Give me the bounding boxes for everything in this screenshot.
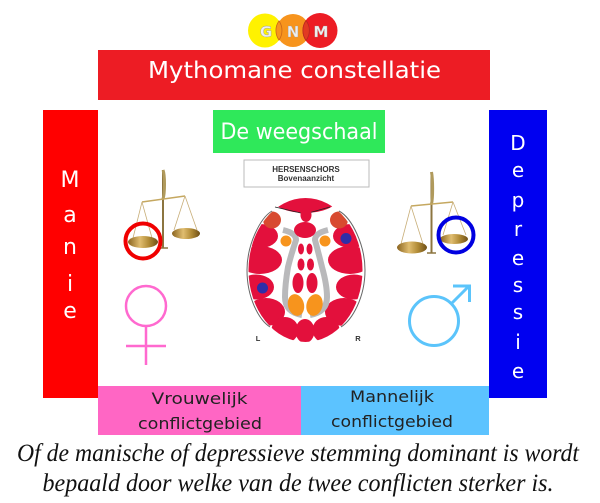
panel: Manie: n	[63, 235, 77, 260]
icon: male symbol	[410, 286, 470, 346]
panel: Mannelijk conflictgebied: Mannelijk	[350, 387, 435, 406]
title banner	[98, 50, 490, 100]
title banner: Mythomane constellatie	[148, 58, 441, 84]
logo: GNM: G	[260, 23, 272, 41]
central red regions	[292, 208, 318, 293]
icon: scales left	[126, 170, 200, 258]
panel: Vrouwelijk conflictgebied: conflictgebied	[138, 414, 262, 433]
panel: Depressie: s	[513, 273, 523, 297]
panel: Manie: i	[67, 272, 73, 297]
panel: Depressie: e	[512, 246, 524, 270]
panel: Depressie: r	[514, 217, 523, 241]
grey ventricles	[283, 230, 302, 315]
panel: Manie: a	[63, 203, 77, 228]
panel: Depressie	[489, 110, 547, 398]
heading: De weegschaal	[213, 110, 385, 153]
logo: GNM: M	[314, 23, 328, 41]
panel: Depressie: e	[512, 158, 524, 182]
outer arcs	[247, 211, 272, 327]
orange regions	[280, 236, 330, 318]
label: Hersenschors: Bovenaanzicht	[278, 174, 335, 183]
panel: Depressie: i	[515, 330, 521, 354]
panel: Depressie: e	[512, 359, 524, 383]
logo: GNM: N	[287, 23, 299, 41]
brain diagram: L	[256, 334, 261, 343]
red cortex lobes	[248, 198, 362, 342]
panel: Vrouwelijk conflictgebied	[98, 386, 301, 435]
icon: female symbol	[126, 286, 166, 365]
caption: bepaald door welke van de twee conflicten sterker is.	[42, 470, 554, 497]
label: Hersenschors: HERSENSCHORS	[272, 165, 340, 174]
panel: Vrouwelijk conflictgebied: Vrouwelijk	[152, 389, 248, 408]
panel: Depressie: D	[510, 131, 526, 155]
panel: Manie: M	[61, 168, 79, 193]
caption: Of de manische of depressieve stemming dominant is wordt	[17, 440, 580, 467]
panel: Mannelijk conflictgebied	[301, 386, 489, 435]
brain diagram	[246, 198, 366, 342]
panel: Depressie: p	[512, 188, 524, 212]
blue conflict markers	[340, 233, 352, 244]
label: Hersenschors	[244, 160, 369, 187]
caption	[17, 440, 580, 497]
panel: Mannelijk conflictgebied: conflictgebied	[331, 412, 453, 431]
logo: GNM	[248, 13, 338, 48]
brain diagram: R	[355, 334, 361, 343]
heading: De weegschaal: De weegschaal	[220, 120, 378, 145]
panel: Depressie: s	[513, 300, 523, 324]
highlight circle: left pan	[126, 224, 160, 258]
panel: Manie	[43, 110, 98, 398]
icon: scales right	[397, 172, 474, 254]
highlight circle: right pan	[438, 218, 474, 252]
panel: Manie: e	[63, 299, 77, 324]
